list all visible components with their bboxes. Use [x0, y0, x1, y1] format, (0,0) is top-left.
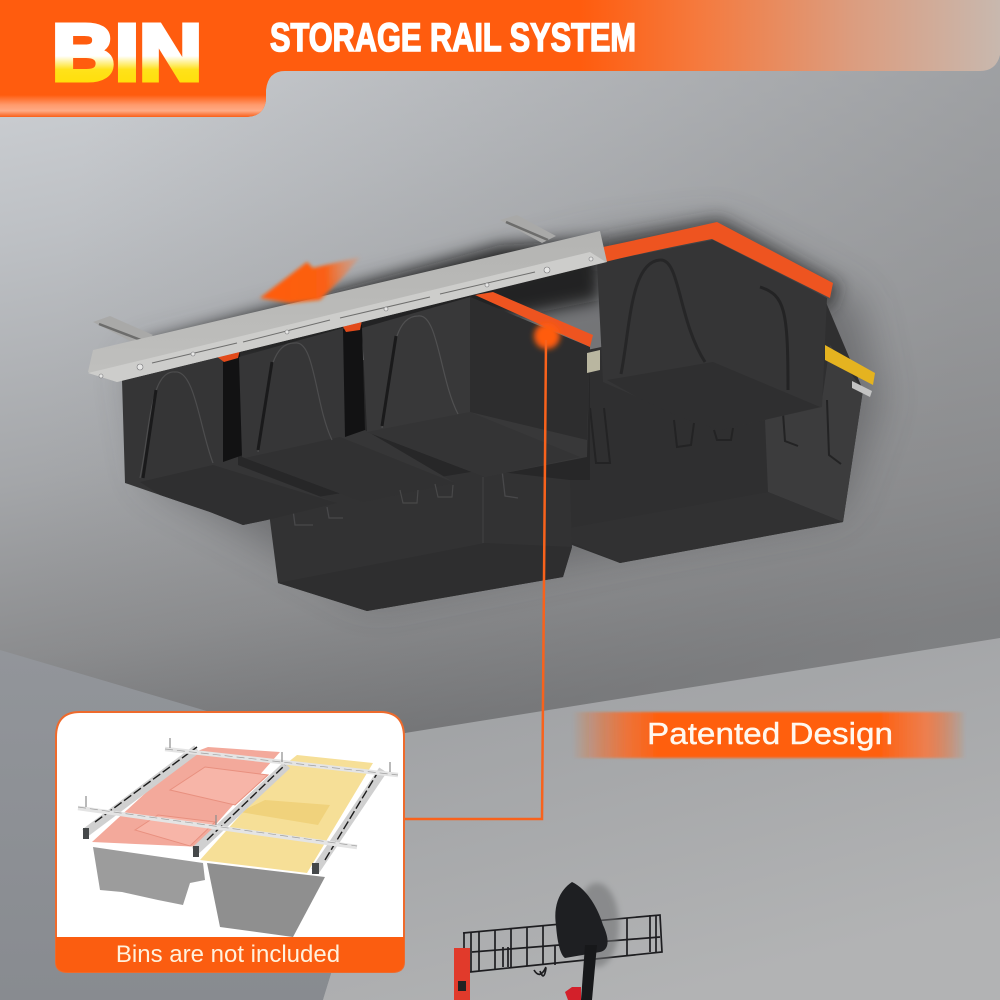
panel card	[56, 712, 404, 972]
main cross rail	[88, 231, 607, 382]
bins illustration	[78, 738, 398, 937]
yellow lid	[200, 755, 373, 873]
bolts	[86, 738, 390, 825]
wire grid	[463, 915, 662, 976]
red grip	[565, 987, 581, 1000]
long rails	[85, 747, 383, 871]
clip	[852, 381, 872, 397]
ceiling background	[0, 0, 1000, 760]
bolts	[99, 257, 593, 378]
small orange lid edges	[216, 320, 362, 362]
rail lower flange	[88, 252, 606, 382]
molded ridges	[590, 400, 841, 464]
subtitle: STORAGE RAIL SYSTEM	[270, 16, 636, 60]
caption text: Bins are not included	[116, 941, 340, 968]
top band	[0, 0, 1000, 117]
bottom	[245, 437, 455, 502]
middle bin	[239, 325, 455, 503]
cross rails	[78, 749, 398, 847]
red level	[454, 948, 470, 1000]
glow dot	[534, 323, 560, 349]
cross rail ends	[93, 215, 556, 346]
header banner	[0, 0, 1000, 117]
right wall	[323, 638, 1000, 1000]
right side face	[765, 345, 863, 522]
inset panel	[56, 712, 404, 972]
left bin	[122, 352, 337, 525]
dark gap behind front bins	[238, 360, 590, 510]
tabs	[293, 470, 518, 525]
bottom face	[278, 543, 572, 611]
left wall	[0, 650, 405, 1000]
orange slide arrow	[260, 257, 360, 303]
wall tool rack	[454, 882, 662, 1000]
bottom face	[607, 362, 820, 430]
lower left bin	[268, 470, 572, 611]
shovel	[555, 882, 608, 958]
caption band	[56, 937, 404, 972]
yellow lid	[825, 345, 875, 385]
right big bin	[540, 300, 875, 563]
right grey bin	[207, 863, 325, 937]
front bin	[362, 292, 593, 477]
rail stub beside bin	[587, 350, 600, 373]
shovel shadow	[575, 883, 619, 967]
orange lid	[603, 222, 833, 298]
left grey bin	[93, 847, 205, 905]
bottom face	[547, 492, 843, 563]
orange lid	[475, 292, 593, 347]
pink lid	[92, 747, 280, 847]
bottom	[140, 465, 337, 525]
mounting rails	[88, 215, 607, 382]
line	[404, 340, 546, 819]
label: Patented Design	[647, 716, 893, 751]
side	[470, 297, 590, 440]
tab highlight strip	[0, 95, 266, 117]
patented design callout	[572, 712, 966, 758]
top right bin	[597, 222, 833, 430]
BIN title: BIN	[52, 8, 202, 97]
leader line	[404, 323, 560, 819]
rail ends	[83, 828, 319, 874]
band	[572, 712, 966, 758]
ceiling shadows behind rack	[130, 218, 880, 600]
shovel handle	[581, 945, 597, 1000]
bottom	[367, 412, 580, 477]
